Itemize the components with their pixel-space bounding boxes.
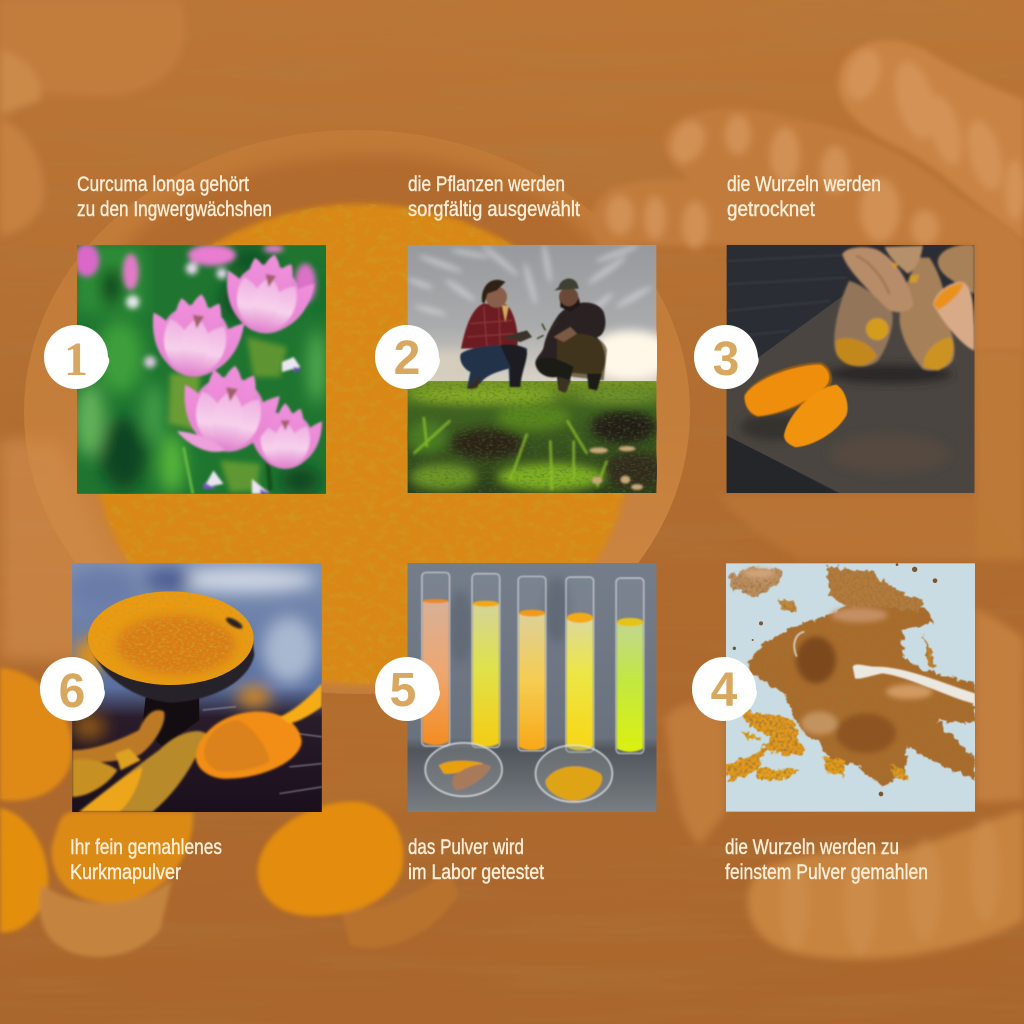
step 3 panel xyxy=(694,173,974,493)
step 3 heading: die Wurzeln werden xyxy=(727,173,881,196)
step 3 number badge: 3 xyxy=(713,333,739,386)
turmeric roots xyxy=(834,244,974,371)
step 1 photo: pink curcuma flowers xyxy=(77,245,326,494)
step 5 number badge xyxy=(375,657,440,721)
step 4 panel xyxy=(692,563,975,884)
step 1 number badge xyxy=(44,325,109,389)
turmeric powder in bowl xyxy=(90,200,635,690)
man xyxy=(535,278,607,393)
step 6 panel xyxy=(40,563,322,884)
step 3 number badge xyxy=(694,325,759,389)
step 1 heading: Curcuma longa gehört xyxy=(77,173,249,196)
step 4 heading: die Wurzeln werden zu xyxy=(725,836,899,859)
step 2 panel xyxy=(375,173,674,493)
woman xyxy=(460,280,532,389)
step 6 number badge xyxy=(40,657,105,721)
cut turmeric slices xyxy=(744,362,848,447)
step 6 photo: bowl and spoon of turmeric powder xyxy=(72,563,322,812)
top left turmeric roots xyxy=(0,0,185,235)
test tube glass xyxy=(422,572,644,754)
step 2 number badge xyxy=(375,325,440,389)
step 6 number badge: 6 xyxy=(59,665,85,718)
roots and spoon xyxy=(72,683,322,812)
step 2 number badge: 2 xyxy=(394,332,420,385)
step 4 heading: feinstem Pulver gemahlen xyxy=(725,861,928,884)
step 6 heading: Kurkmapulver xyxy=(70,861,181,884)
bowl rim xyxy=(0,130,690,810)
step 2 photo: two farmers crouching in a field xyxy=(407,245,657,493)
step 1 heading: zu den Ingwergwächshen xyxy=(77,198,272,221)
bowl of powder xyxy=(87,591,254,747)
step 4 number badge xyxy=(692,657,757,721)
spoon xyxy=(794,632,975,704)
step 3 photo: turmeric roots on dark board xyxy=(726,245,975,493)
right and lower right turmeric roots xyxy=(665,350,1024,959)
step 3 heading: getrocknet xyxy=(727,198,815,221)
powder heap xyxy=(726,567,975,787)
step 1 number badge: 1 xyxy=(64,333,88,386)
step 4 number badge: 4 xyxy=(711,664,738,717)
top right turmeric roots xyxy=(591,40,1024,350)
step 2 heading: sorgfältig ausgewählt xyxy=(408,198,580,221)
lower left turmeric slices xyxy=(0,668,458,957)
step 1 panel xyxy=(44,173,329,494)
step 5 heading: das Pulver wird xyxy=(408,836,524,859)
step 2 heading: die Pflanzen werden xyxy=(408,173,565,196)
step 5 panel xyxy=(375,563,656,884)
step 5 number badge: 5 xyxy=(390,664,416,717)
step 5 heading: im Labor getestet xyxy=(408,861,544,884)
dishes with turmeric xyxy=(425,743,612,802)
step 5 photo: five test tubes and two dishes xyxy=(408,563,656,812)
step 6 heading: Ihr fein gemahlenes xyxy=(70,836,222,859)
step 4 photo: ground turmeric powder with spoon xyxy=(726,563,975,812)
test tube liquids xyxy=(422,599,643,752)
